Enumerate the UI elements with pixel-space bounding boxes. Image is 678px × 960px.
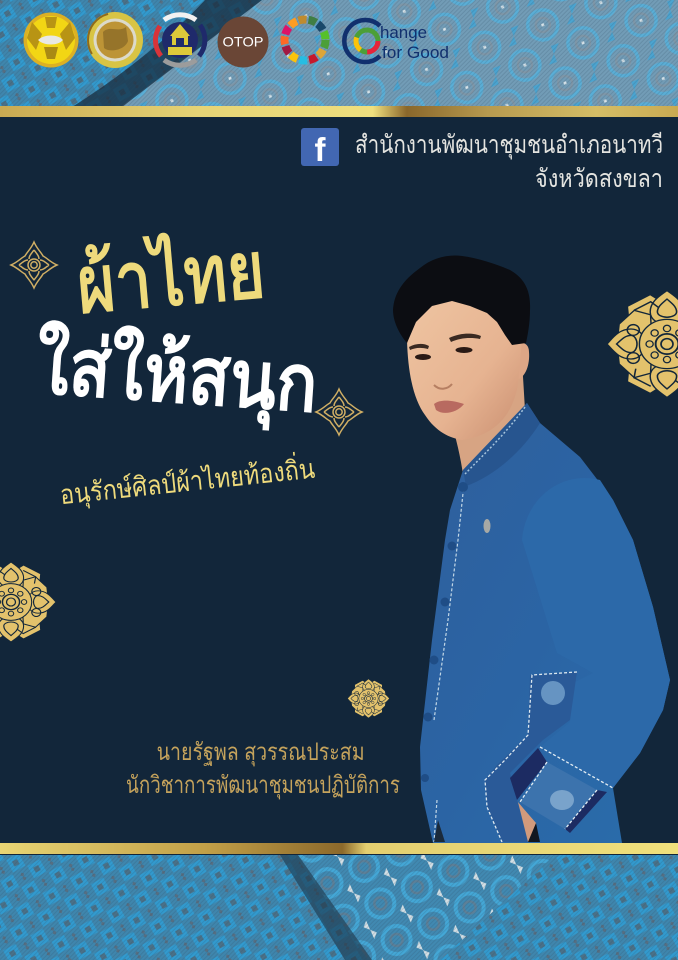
title: line two: ใส่ให้สนุก bbox=[33, 319, 321, 433]
logo: SDG wheel bbox=[284, 20, 326, 60]
frog buttons bbox=[421, 482, 468, 782]
portrait bbox=[393, 256, 670, 843]
facebook icon bbox=[301, 128, 339, 168]
subtitle: อนุรักษ์ศิลป์ผ้าไทยท้องถิ่น bbox=[58, 450, 316, 512]
placket stitching bbox=[434, 484, 464, 842]
presenter name: นักวิชาการพัฒนาชุมชนปฏิบัติการ bbox=[126, 772, 400, 800]
cuff pattern bbox=[520, 762, 597, 829]
left eye bbox=[415, 354, 431, 360]
logo: community development emblem bbox=[155, 15, 205, 65]
bottom gold bar bbox=[0, 843, 678, 854]
pocket stitching bbox=[485, 672, 577, 842]
logo: Change for Good bbox=[344, 20, 449, 62]
right eyebrow bbox=[449, 334, 481, 342]
embroidery circle bbox=[541, 681, 565, 705]
ornament: small flower bbox=[348, 679, 390, 718]
shirt body bbox=[420, 403, 670, 843]
bottom fabric band bbox=[0, 855, 678, 960]
ear bbox=[512, 343, 529, 380]
ornament: flower left bbox=[0, 562, 56, 642]
collar bbox=[463, 403, 540, 486]
top fabric band bbox=[0, 0, 678, 107]
facebook icon: f bbox=[314, 131, 326, 168]
lips bbox=[434, 401, 464, 413]
top gold bar bbox=[0, 106, 678, 117]
presenter name: นายรัฐพล สุวรรณประสม bbox=[157, 739, 365, 767]
collar stitching bbox=[465, 407, 525, 474]
right eye bbox=[456, 347, 472, 353]
ornament: star mid bbox=[316, 389, 362, 435]
embroidered pocket panel bbox=[485, 672, 577, 842]
logo: Change for Good: for Good bbox=[382, 43, 449, 62]
logo row bbox=[24, 12, 449, 68]
logo: OTOP: OTOP bbox=[222, 34, 264, 50]
face bbox=[407, 295, 522, 440]
cuff dark band bbox=[510, 748, 547, 800]
cuff motif bbox=[550, 790, 574, 810]
cuff end band bbox=[565, 790, 607, 833]
neck bbox=[452, 360, 525, 482]
lapel pin bbox=[484, 519, 490, 533]
logo: OTOP bbox=[218, 16, 268, 68]
sleeve bbox=[522, 478, 670, 788]
shirt hem shadow bbox=[434, 820, 445, 842]
logo: gold medallion bbox=[87, 12, 143, 68]
logo: provincial seal bbox=[24, 12, 78, 68]
ornament: star upper left bbox=[11, 242, 57, 288]
logo: Change for Good: hange bbox=[380, 23, 427, 42]
nose shadow bbox=[434, 384, 452, 389]
hand bbox=[518, 802, 538, 842]
hair bbox=[393, 256, 530, 345]
ornament: flower right bbox=[607, 290, 678, 398]
cuff stitching bbox=[520, 747, 613, 829]
title: line one: ผ้าไทย bbox=[73, 225, 268, 330]
left eyebrow bbox=[409, 344, 429, 350]
pocket shadow bbox=[528, 823, 540, 842]
